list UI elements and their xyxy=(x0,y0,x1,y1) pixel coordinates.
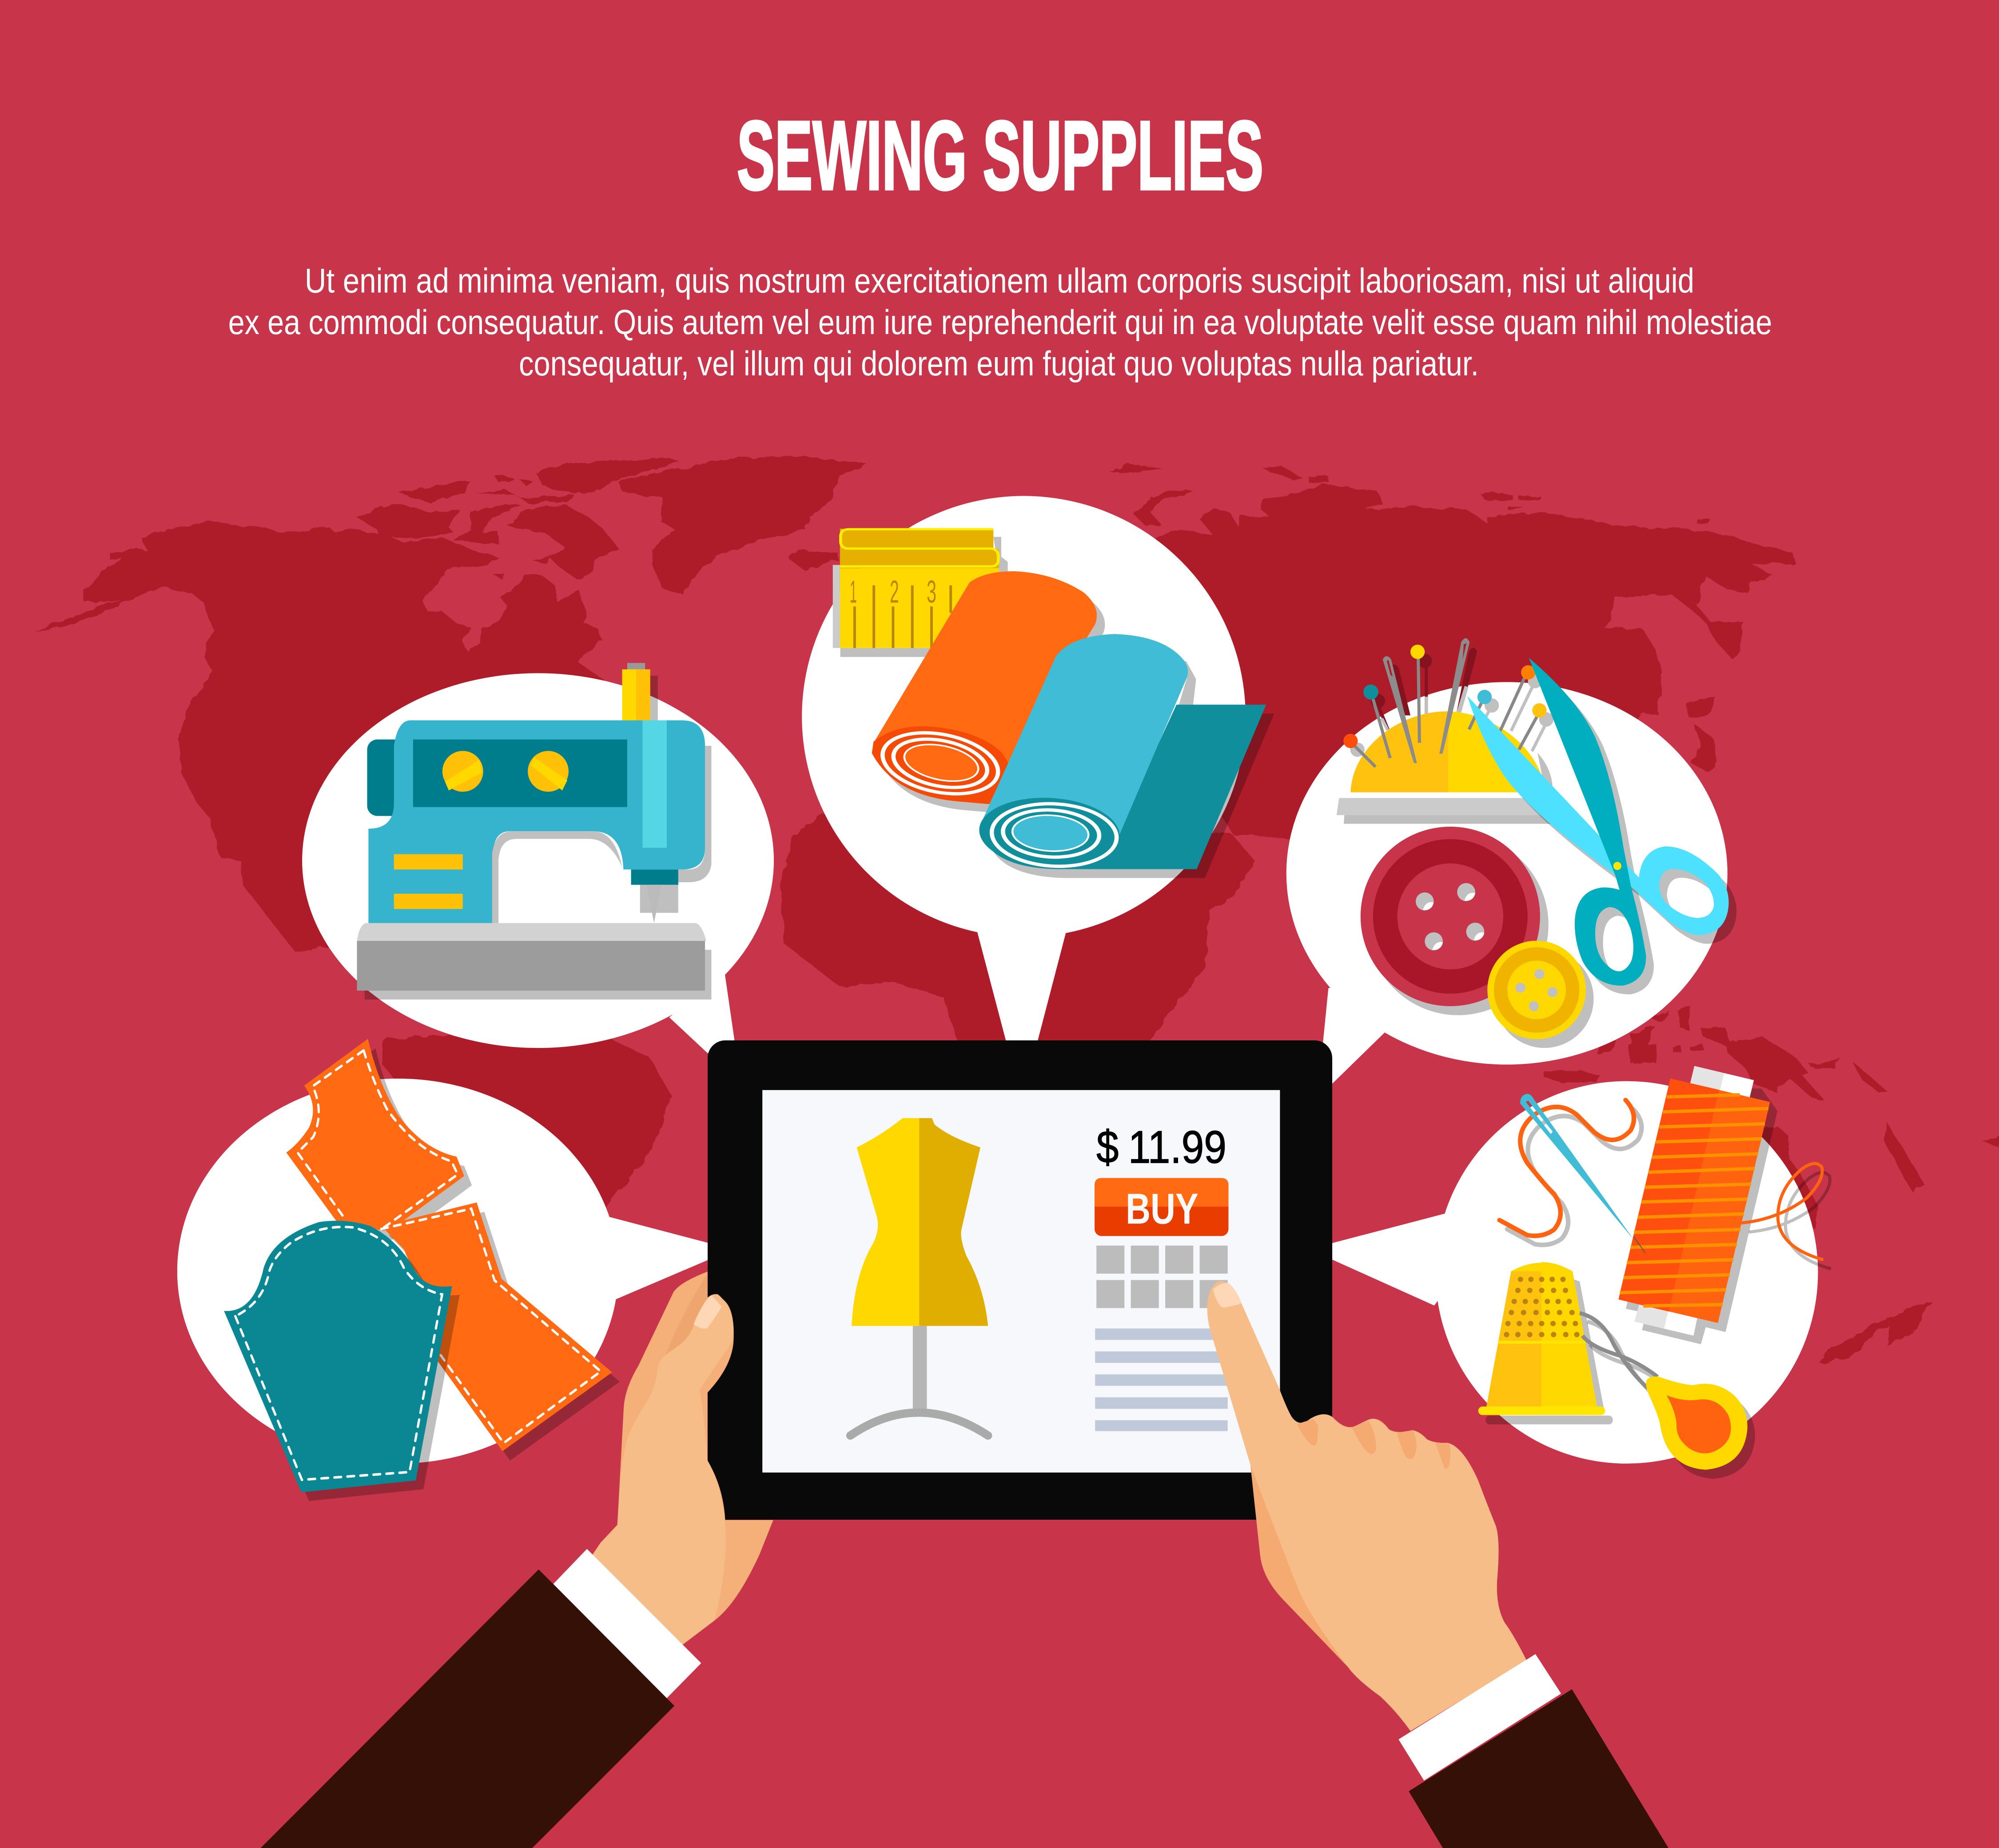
tablet xyxy=(708,1040,1332,1520)
speech bubble: fabric xyxy=(802,496,1246,1045)
icon: seam ripper xyxy=(1580,1313,1755,1479)
speech bubble: sewing machine xyxy=(302,673,774,1053)
speech bubble: thread xyxy=(1332,1081,1818,1464)
title: SEWING SUPPLIES xyxy=(737,100,1263,210)
left hand xyxy=(593,1271,773,1645)
speech bubble: notions xyxy=(1286,682,1728,1083)
icon: yellow button xyxy=(1487,941,1594,1048)
price: $ xyxy=(1096,1121,1119,1172)
icon: red button xyxy=(1361,827,1549,1015)
intro text: consequatur, vel illum qui dolorem eum fugiat quo voluptas nulla pariatur. xyxy=(519,345,1479,383)
icon: thread spool xyxy=(1618,1066,1777,1344)
left sleeve xyxy=(260,1569,674,1848)
buy button: BUY xyxy=(1126,1184,1199,1233)
intro text xyxy=(228,262,1772,383)
buy button xyxy=(1095,1178,1228,1236)
world map background xyxy=(34,455,1999,1364)
intro text: ex ea commodi consequatur. Quis autem vel eum iure reprehenderit qui in ea voluptate velit esse quam nihil molestiae xyxy=(228,303,1772,342)
icon: sewing machine xyxy=(357,663,711,1000)
icon: tape measure xyxy=(833,529,1008,657)
icon: scissors xyxy=(1467,658,1736,994)
product description lines xyxy=(1095,1328,1228,1431)
icon: pin cushion xyxy=(1337,638,1556,824)
orange upper piece xyxy=(287,1039,464,1231)
price: 11.99 xyxy=(1128,1121,1226,1172)
right shirt cuff xyxy=(1398,1654,1561,1780)
icon: thimble xyxy=(1478,1262,1613,1424)
left shirt cuff xyxy=(554,1549,701,1698)
icon: dress form xyxy=(850,1118,988,1436)
icon: needle and thread xyxy=(1500,1094,1831,1269)
price xyxy=(1096,1121,1226,1172)
icon: orange fabric roll xyxy=(872,571,1105,813)
product options grid xyxy=(1096,1246,1228,1308)
teal piece xyxy=(224,1221,452,1492)
icon: tape measure: 1 xyxy=(850,574,857,609)
icon: blue fabric roll xyxy=(976,634,1274,878)
right sleeve xyxy=(1409,1689,1669,1848)
icon: tape measure: 3 xyxy=(927,574,936,609)
right hand xyxy=(1207,1281,1526,1731)
icon: pattern pieces xyxy=(224,1039,620,1501)
tablet screen xyxy=(762,1090,1280,1473)
speech bubble: patterns xyxy=(177,1079,709,1464)
intro text: Ut enim ad minima veniam, quis nostrum exercitationem ullam corporis suscipit laboriosam, nisi ut aliquid xyxy=(305,262,1694,300)
orange lower piece xyxy=(381,1203,612,1451)
icon: tape measure: 2 xyxy=(890,574,899,609)
